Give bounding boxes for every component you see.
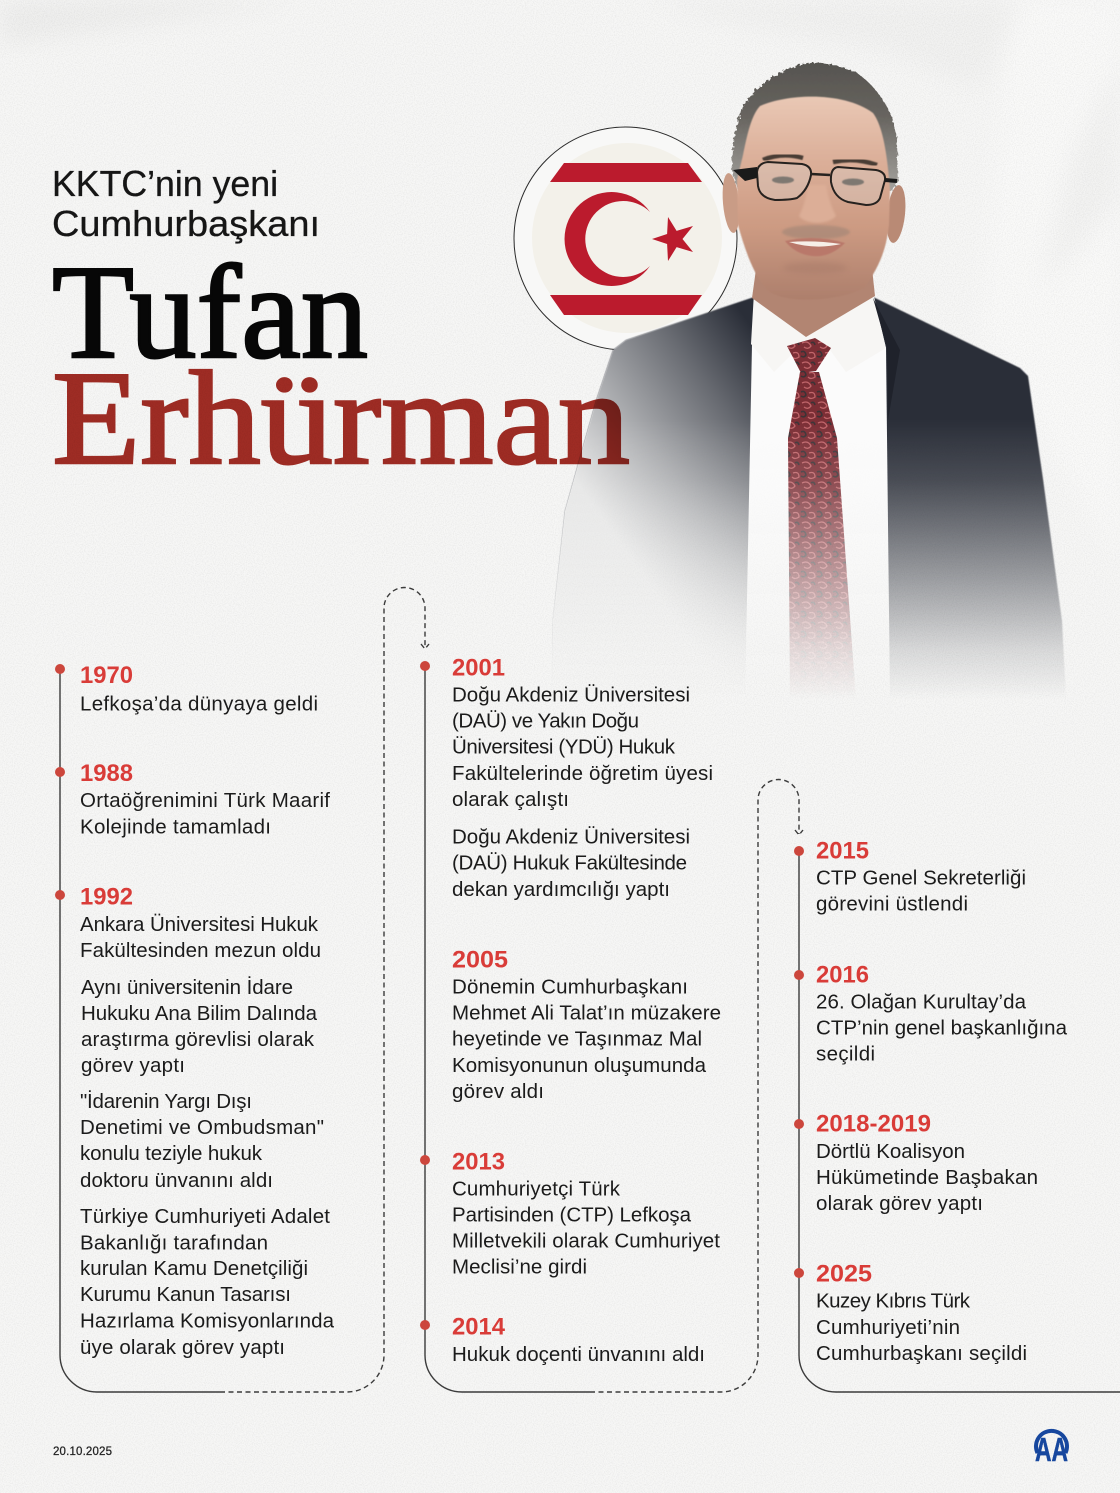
suit, shirt and tie xyxy=(552,292,1066,700)
entry 1992: Türkiye Cumhuriyeti Adalet xyxy=(80,1205,330,1228)
entry 1992: Ankara Üniversitesi Hukuk xyxy=(80,913,319,936)
neck xyxy=(752,250,875,337)
entry 2013: Partisinden (CTP) Lefkoşa xyxy=(452,1204,692,1226)
entry 2018-2019: olarak görev yaptı xyxy=(816,1192,983,1215)
entry 1988: Ortaöğrenimini Türk Maarif xyxy=(80,789,330,812)
entry 2001: (DAÜ) ve Yakın Doğu xyxy=(452,710,639,732)
flag circle xyxy=(514,127,737,350)
entry 1970 xyxy=(55,662,318,716)
entry 1988: Kolejinde tamamladı xyxy=(80,816,271,838)
entry 2001 xyxy=(420,654,713,901)
name: Tufan: Tufan xyxy=(52,238,368,386)
entry 1992: "İdarenin Yargı Dışı xyxy=(80,1090,252,1113)
heading: Cumhurbaşkanı xyxy=(52,203,320,244)
date: 20.10.2025 xyxy=(53,1446,112,1458)
entry 2025: Cumhuriyeti’nin xyxy=(816,1316,960,1339)
moustache shadow xyxy=(782,225,850,239)
column 3 line xyxy=(799,851,1120,1392)
right ear xyxy=(884,184,908,244)
entry 2013: 2013 xyxy=(452,1148,505,1176)
entry 2015 xyxy=(794,838,1026,916)
entry 2005: görev aldı xyxy=(452,1080,544,1103)
column 3 timeline xyxy=(794,838,1068,1365)
flag star xyxy=(652,217,693,261)
column 2 timeline xyxy=(420,654,721,1366)
entry 2013: Meclisi’ne girdi xyxy=(452,1256,587,1278)
hair xyxy=(732,63,898,195)
entry 1992: konulu teziyle hukuk xyxy=(80,1142,263,1165)
nose xyxy=(799,185,836,223)
entry 2013 xyxy=(420,1148,720,1278)
entry 2001: Üniversitesi (YDÜ) Hukuk xyxy=(452,736,676,758)
heading xyxy=(52,163,320,244)
entry 2016 xyxy=(794,962,1068,1066)
entry 1970: Lefkoşa’da dünyaya geldi xyxy=(80,692,318,716)
flag top stripe xyxy=(550,163,702,182)
entry 1988: 1988 xyxy=(80,760,133,787)
glasses xyxy=(733,162,897,205)
eyes xyxy=(772,176,794,184)
mouth xyxy=(785,238,845,256)
portrait xyxy=(552,63,1066,700)
entry 1992: üye olarak görev yaptı xyxy=(80,1336,285,1359)
entry 2001: 2001 xyxy=(452,654,505,682)
entry 1992: kurulan Kamu Denetçiliği xyxy=(80,1257,308,1280)
entry 2005: Mehmet Ali Talat’ın müzakere xyxy=(452,1002,721,1024)
entry 1970: 1970 xyxy=(80,662,133,689)
entry 1992: Kurumu Kanun Tasarısı xyxy=(80,1283,291,1306)
entry 2025: Kuzey Kıbrıs Türk xyxy=(816,1290,971,1312)
entry 1992: Fakültesinden mezun oldu xyxy=(80,939,321,962)
entry 2013: Cumhuriyetçi Türk xyxy=(452,1178,621,1200)
entry 2016: seçildi xyxy=(816,1042,875,1066)
entry 2018-2019: Hükümetinde Başbakan xyxy=(816,1166,1038,1189)
entry 2025: 2025 xyxy=(816,1260,872,1288)
entry 2005: 2005 xyxy=(452,946,508,974)
entry 2001: (DAÜ) Hukuk Fakültesinde xyxy=(452,852,687,874)
entry 2001: olarak çalıştı xyxy=(452,788,569,811)
entry 2018-2019 xyxy=(794,1110,1038,1215)
entry 2014: 2014 xyxy=(452,1314,506,1340)
entry 1992: Bakanlığı tarafından xyxy=(80,1232,268,1254)
timeline connector lines xyxy=(60,587,1120,1392)
entry 1992: görev yaptı xyxy=(81,1054,185,1077)
entry 2025 xyxy=(794,1260,1027,1365)
entry 2014 xyxy=(420,1314,705,1366)
chin shadow xyxy=(783,262,847,274)
entry 1992: araştırma görevlisi olarak xyxy=(81,1028,315,1051)
entry 1988 xyxy=(55,760,330,838)
heading: KKTC’nin yeni xyxy=(52,163,278,204)
entry 1992 xyxy=(55,884,335,1359)
entry 1992: Hukuku Ana Bilim Dalında xyxy=(81,1002,318,1025)
name: Erhürman: Erhürman xyxy=(52,344,630,492)
entry 1992: Aynı üniversitenin İdare xyxy=(81,976,293,999)
entry 2005: heyetinde ve Taşınmaz Mal xyxy=(452,1028,702,1050)
entry 2005 xyxy=(452,946,721,1103)
entry 2013: Milletvekili olarak Cumhuriyet xyxy=(452,1230,720,1252)
entry 2016: CTP’nin genel başkanlığına xyxy=(816,1016,1068,1040)
brows xyxy=(763,155,803,160)
flag disc xyxy=(532,143,722,333)
entry 2001: Fakültelerinde öğretim üyesi xyxy=(452,762,713,785)
entry 2001: Doğu Akdeniz Üniversitesi xyxy=(452,684,690,706)
face xyxy=(737,97,890,300)
entry 2015: 2015 xyxy=(816,838,869,864)
dashed connector 1 xyxy=(220,587,429,1392)
logo: AA: AA xyxy=(1035,1431,1068,1468)
entry 2005: Dönemin Cumhurbaşkanı xyxy=(452,976,688,998)
entry 2001: Doğu Akdeniz Üniversitesi xyxy=(452,826,690,848)
entry 2015: görevini üstlendi xyxy=(816,892,968,916)
entry 2005: Komisyonunun oluşumunda xyxy=(452,1054,707,1077)
left ear xyxy=(720,172,742,234)
dashed connector 2 xyxy=(590,779,803,1392)
entry 1992: 1992 xyxy=(80,884,133,910)
entry 2016: 2016 xyxy=(816,962,869,988)
entry 1992: doktoru ünvanını aldı xyxy=(80,1169,273,1192)
flag bottom stripe xyxy=(550,295,702,315)
entry 2018-2019: Dörtlü Koalisyon xyxy=(816,1140,965,1163)
entry 2015: CTP Genel Sekreterliği xyxy=(816,866,1026,890)
column 1 timeline xyxy=(55,662,335,1359)
entry 2018-2019: 2018-2019 xyxy=(816,1110,931,1138)
column 1 line xyxy=(60,669,220,1392)
entry 2001: dekan yardımcılığı yaptı xyxy=(452,878,670,901)
entry 1992: Hazırlama Komisyonlarında xyxy=(80,1310,335,1332)
entry 2014: Hukuk doçenti ünvanını aldı xyxy=(452,1343,705,1366)
flag crescent xyxy=(565,192,650,286)
logo: AA xyxy=(1035,1431,1068,1468)
entry 2025: Cumhurbaşkanı seçildi xyxy=(816,1342,1027,1365)
entry 1992: Denetimi ve Ombudsman" xyxy=(80,1116,324,1139)
entry 2016: 26. Olağan Kurultay’da xyxy=(816,990,1027,1014)
column 2 line xyxy=(425,666,590,1392)
